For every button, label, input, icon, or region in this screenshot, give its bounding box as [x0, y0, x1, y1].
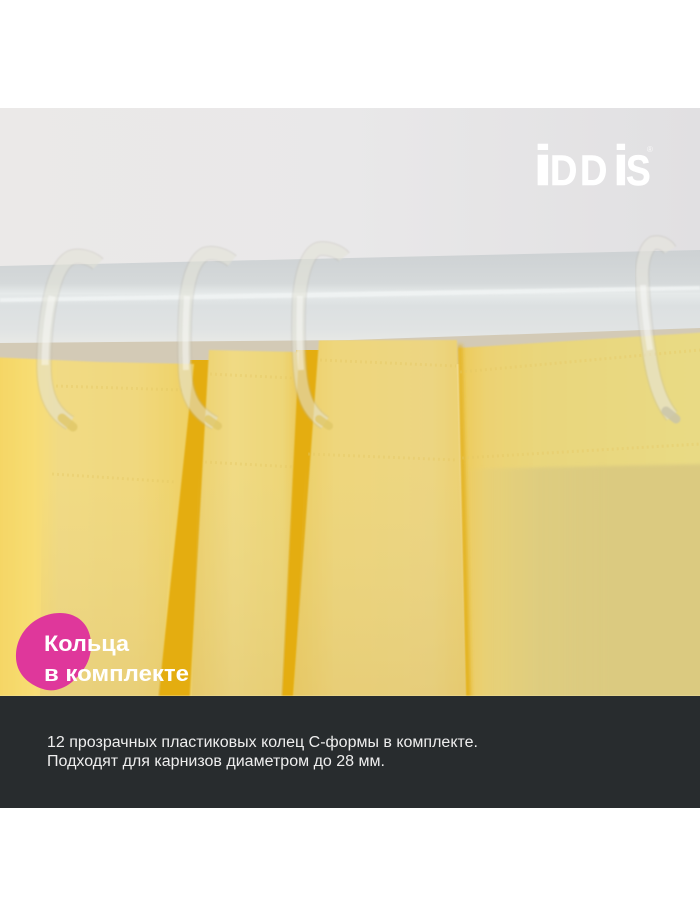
ring 1 [44, 256, 98, 427]
logo: IDDIS: S [626, 147, 651, 195]
logo: IDDIS: i [613, 134, 629, 198]
logo: IDDIS [533, 134, 653, 198]
seam shading on panels [40, 660, 162, 696]
caption text: 12 прозрачных пластиковых колец С-формы в комплекте. [47, 734, 478, 751]
photo: shower curtain on rod with rings [0, 108, 700, 720]
logo: IDDIS: ® [647, 145, 653, 154]
caption text: Подходят для карнизов диаметром до 28 мм. [47, 753, 385, 770]
curtain panel 4 [458, 332, 700, 710]
curtain panel 1 [0, 357, 194, 710]
ring 2 [184, 253, 232, 426]
curtain rod [0, 250, 700, 343]
curtain panel 4 lower shade [514, 464, 700, 696]
seams: dotted stitching [52, 350, 700, 482]
shadow band under rod [0, 328, 700, 364]
dark fold 1 [156, 360, 210, 710]
heading: в комплекте [44, 661, 189, 686]
heading: Кольца [44, 631, 130, 656]
caption text [47, 734, 478, 770]
logo: IDDIS: D [550, 146, 577, 195]
rod highlight [0, 286, 700, 302]
curtain panel 2 [189, 350, 299, 710]
dark fold 2 [280, 350, 320, 710]
wall [0, 108, 700, 266]
logo: IDDIS: i [533, 134, 553, 197]
heading [44, 631, 189, 686]
fold shadow between panels 3 and 4 [458, 345, 471, 710]
pink blob badge [16, 613, 91, 690]
bottom edge highlight [0, 695, 700, 696]
logo: IDDIS: D [580, 146, 607, 195]
curtain panel 3 [292, 340, 466, 710]
dark caption band [0, 696, 700, 808]
ring 4 [642, 242, 676, 419]
ring 3 [298, 249, 344, 426]
